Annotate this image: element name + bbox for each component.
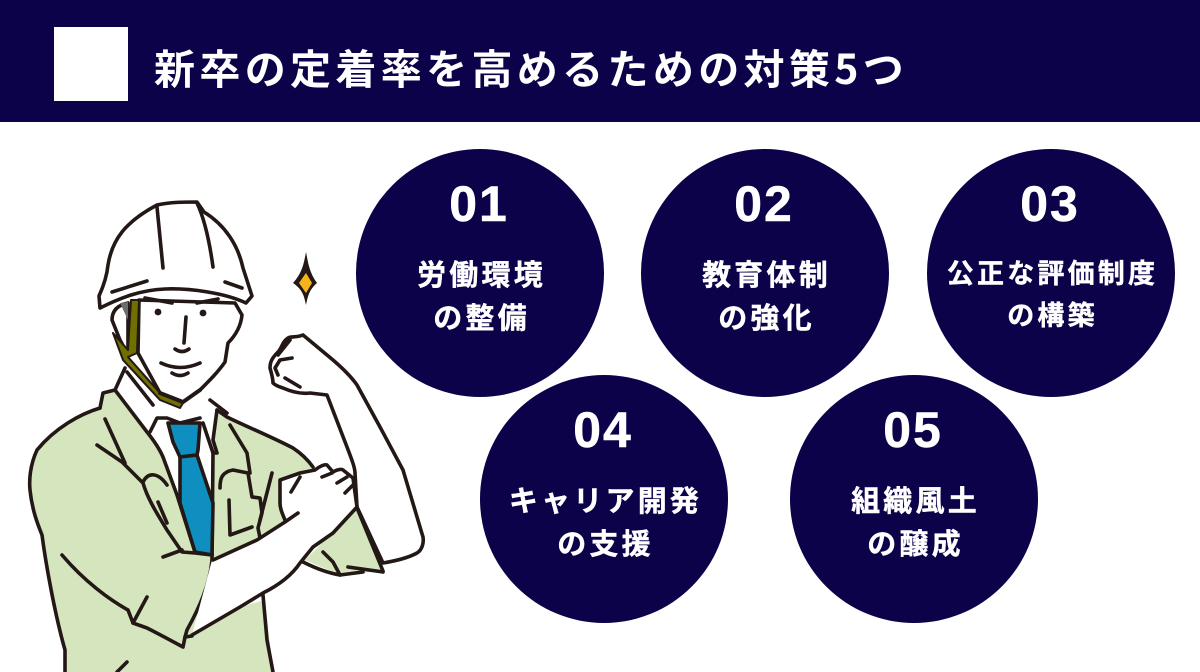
sleeve cuff xyxy=(303,508,383,575)
crossed forearm and hand xyxy=(192,465,357,635)
necktie xyxy=(168,423,213,555)
label line 2: の支援 xyxy=(557,521,654,563)
label line 2: の醸成 xyxy=(867,521,964,563)
label line 2: の構築 xyxy=(1007,294,1098,333)
label line 2: の強化 xyxy=(718,295,815,337)
label line 1: 教育体制 xyxy=(702,252,831,294)
number 03: 03 xyxy=(1020,176,1080,232)
hard hat xyxy=(99,202,252,308)
number 05: 05 xyxy=(883,402,943,458)
jacket details left xyxy=(62,419,212,672)
label line 1: 組織風土 xyxy=(851,478,980,520)
head and face xyxy=(112,298,242,408)
label line 2: の整備 xyxy=(433,295,530,337)
number 02: 02 xyxy=(734,176,794,232)
icon: sparkle xyxy=(293,252,317,305)
panel: circle 05 xyxy=(790,375,1038,623)
shirt collar xyxy=(115,368,227,555)
title: 新卒の定着率を高めるための対策5つ xyxy=(154,36,908,96)
header band xyxy=(0,0,1200,122)
panel: circle 04 xyxy=(480,375,728,623)
logo placeholder square xyxy=(54,27,128,101)
raised arm xyxy=(270,335,423,563)
panel: circle 03 xyxy=(927,149,1175,397)
number 01: 01 xyxy=(449,176,509,232)
label line 1: 公正な評価制度 xyxy=(947,252,1158,291)
label line 1: キャリア開発 xyxy=(509,478,702,520)
label line 1: 労働環境 xyxy=(417,252,546,294)
panel: circle 02 xyxy=(641,149,889,397)
jacket body xyxy=(30,390,357,672)
jacket details right: pocket xyxy=(220,425,272,538)
number 04: 04 xyxy=(573,402,633,458)
panel: circle 01 xyxy=(356,149,604,397)
